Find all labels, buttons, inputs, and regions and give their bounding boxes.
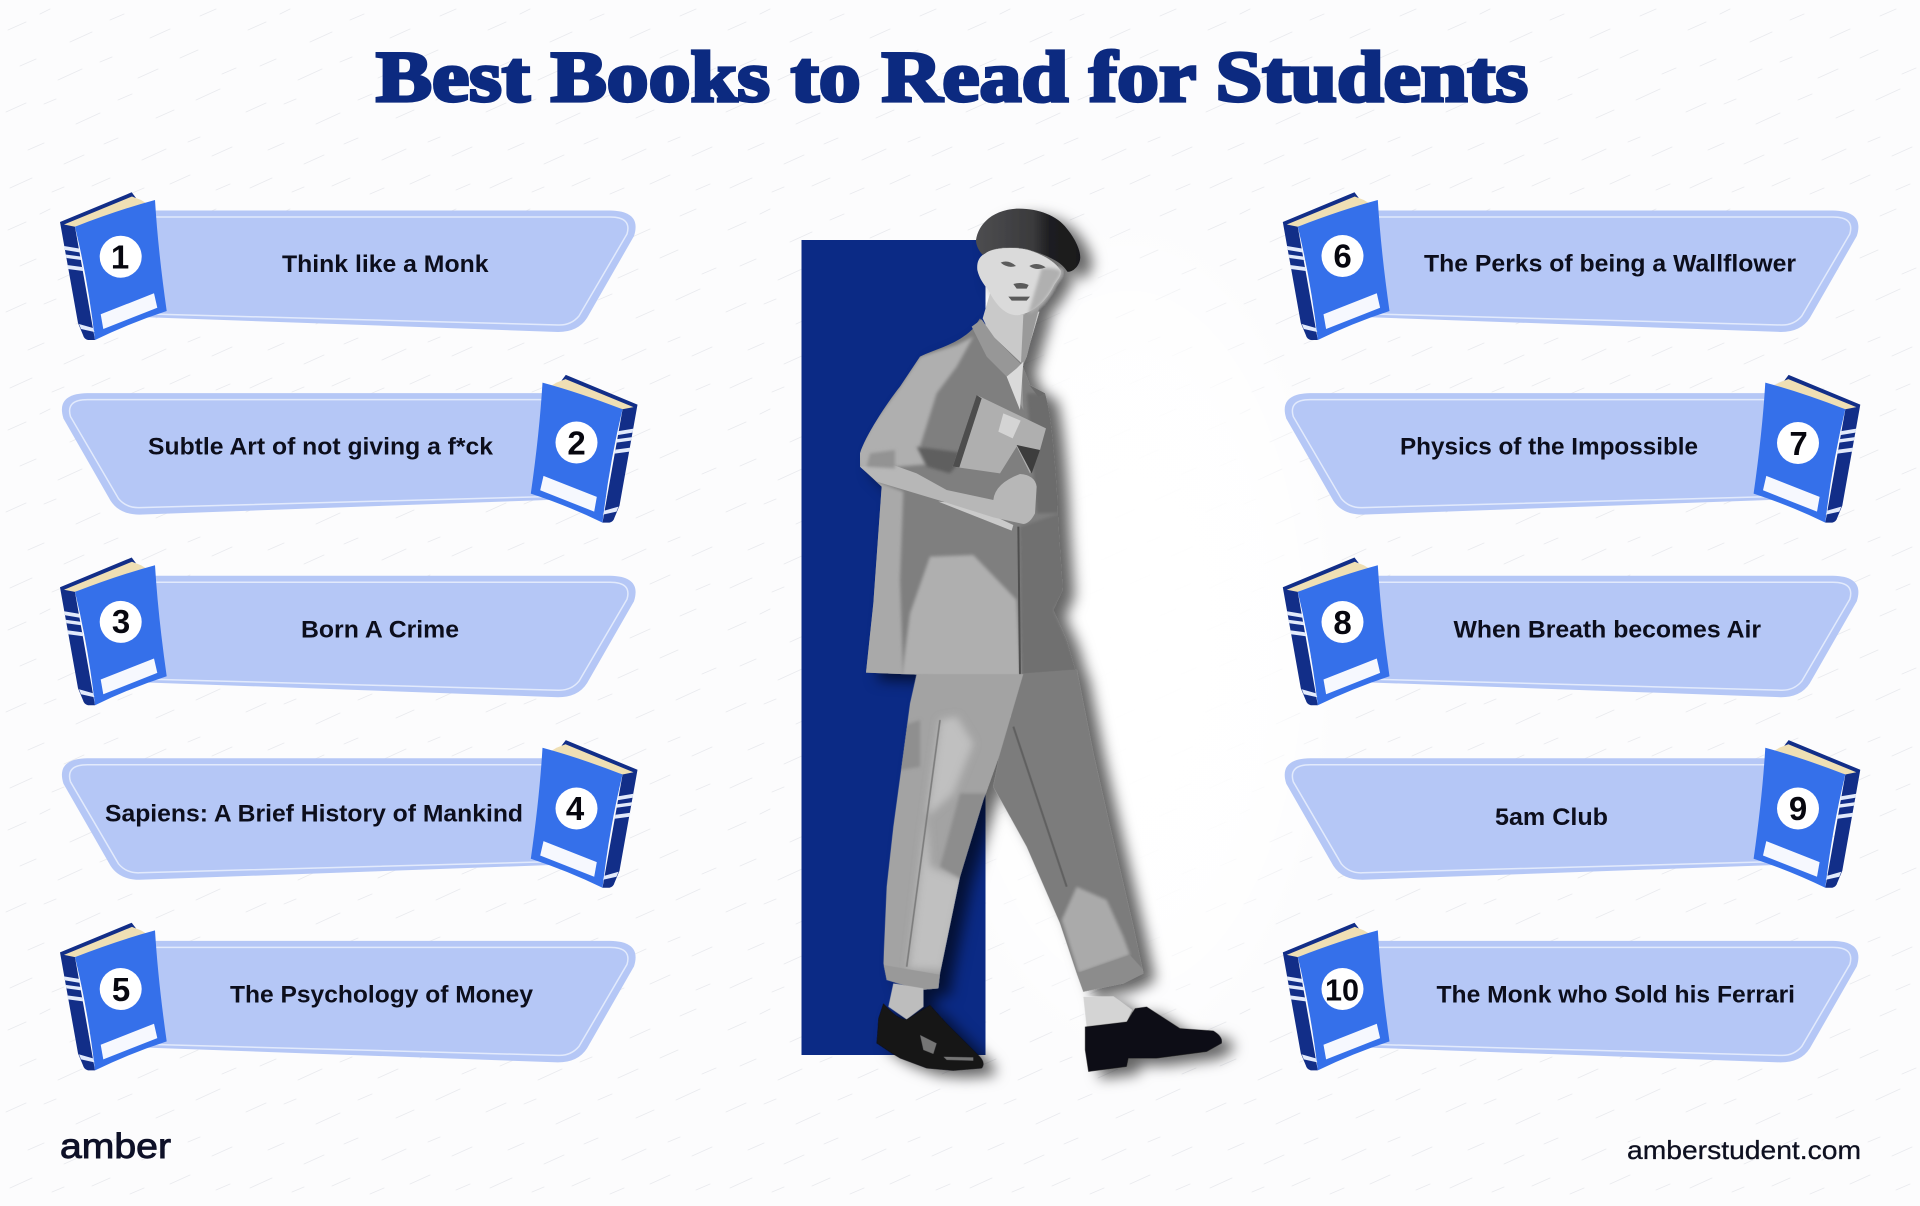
banner 3 bbox=[140, 576, 636, 697]
panel: book 2 bbox=[62, 375, 638, 523]
book title 6: The Perks of being a Wallflower bbox=[1424, 250, 1796, 278]
book title 7: Physics of the Impossible bbox=[1400, 434, 1698, 460]
number 8 bbox=[1322, 601, 1364, 643]
book title 3: Born A Crime bbox=[301, 616, 459, 644]
icon: book 6 bbox=[1283, 192, 1390, 340]
collar bbox=[972, 319, 1023, 410]
book title 8: When Breath becomes Air bbox=[1454, 616, 1761, 644]
number 10: 10 bbox=[1325, 972, 1359, 1008]
panel: book 5 bbox=[60, 923, 636, 1070]
book title 2: Subtle Art of not giving a f*ck bbox=[148, 434, 494, 460]
shirt bbox=[853, 313, 1087, 680]
banner 2 bbox=[62, 393, 558, 515]
book title 4: Sapiens: A Brief History of Mankind bbox=[105, 800, 523, 828]
banner 5 bbox=[140, 941, 636, 1062]
right leg bbox=[987, 667, 1153, 1000]
icon: book 7 bbox=[1754, 375, 1860, 523]
icon: book 10 bbox=[1283, 923, 1390, 1070]
panel: book 3 bbox=[60, 558, 636, 705]
banner 7 bbox=[1285, 393, 1780, 515]
number 3 bbox=[100, 601, 142, 643]
number 1 bbox=[100, 236, 142, 278]
student figure with book bbox=[853, 209, 1222, 1072]
banner 10 bbox=[1363, 941, 1858, 1062]
panel: book 10 bbox=[1283, 923, 1858, 1070]
left shoe bbox=[877, 1003, 983, 1071]
panel: book 9 bbox=[1285, 740, 1860, 888]
panel: book 1 bbox=[60, 192, 636, 340]
number 1: 1 bbox=[111, 238, 129, 276]
icon: book 1 bbox=[60, 192, 167, 340]
number 6 bbox=[1322, 235, 1364, 277]
icon: book 2 bbox=[531, 375, 638, 523]
beret bbox=[976, 209, 1080, 272]
panel: book 6 bbox=[1283, 192, 1858, 340]
number 10 bbox=[1322, 968, 1364, 1010]
book title 9: 5am Club bbox=[1495, 804, 1608, 831]
upper body bbox=[853, 209, 1087, 680]
book title 1: Think like a Monk bbox=[282, 251, 489, 278]
number 2: 2 bbox=[567, 424, 586, 462]
forearm and hand bbox=[860, 465, 1037, 524]
panel: book 8 bbox=[1283, 558, 1858, 705]
number 9: 9 bbox=[1789, 790, 1807, 827]
icon: book 3 bbox=[60, 558, 167, 705]
legs and shoes bbox=[877, 667, 1222, 1072]
number 8: 8 bbox=[1333, 604, 1352, 641]
banner 6 bbox=[1363, 210, 1858, 332]
icon: book 5 bbox=[60, 923, 167, 1070]
title: Best Books to Read for Students bbox=[376, 37, 1528, 117]
banner 9 bbox=[1285, 758, 1780, 880]
number 4: 4 bbox=[566, 790, 585, 827]
blue rectangle behind the student bbox=[802, 240, 986, 1055]
number 5 bbox=[100, 968, 142, 1010]
right shoe bbox=[1085, 1007, 1222, 1072]
icon: book 9 bbox=[1754, 740, 1860, 888]
book held under arm bbox=[953, 395, 1046, 473]
logo: amber: amber bbox=[60, 1127, 171, 1166]
number 9 bbox=[1777, 788, 1819, 830]
number 5: 5 bbox=[112, 971, 130, 1008]
number 7 bbox=[1777, 422, 1819, 464]
banner 4 bbox=[62, 758, 558, 880]
face bbox=[977, 248, 1061, 315]
website url: amberstudent.com bbox=[1627, 1135, 1861, 1165]
book title 10: The Monk who Sold his Ferrari bbox=[1436, 982, 1795, 1008]
number 3: 3 bbox=[112, 603, 130, 640]
number 4 bbox=[556, 788, 598, 830]
number 2 bbox=[556, 422, 598, 464]
number 7: 7 bbox=[1789, 425, 1808, 462]
banner 8 bbox=[1363, 576, 1858, 697]
panel: book 4 bbox=[62, 740, 638, 888]
icon: book 4 bbox=[531, 740, 638, 888]
banner 1 bbox=[140, 210, 636, 332]
number 6: 6 bbox=[1333, 238, 1352, 274]
left leg bbox=[880, 670, 1030, 993]
socks bbox=[888, 983, 923, 1019]
panel: book 7 bbox=[1285, 375, 1860, 523]
book title 5: The Psychology of Money bbox=[230, 982, 534, 1008]
icon: book 8 bbox=[1283, 558, 1390, 705]
neck bbox=[983, 293, 1039, 372]
